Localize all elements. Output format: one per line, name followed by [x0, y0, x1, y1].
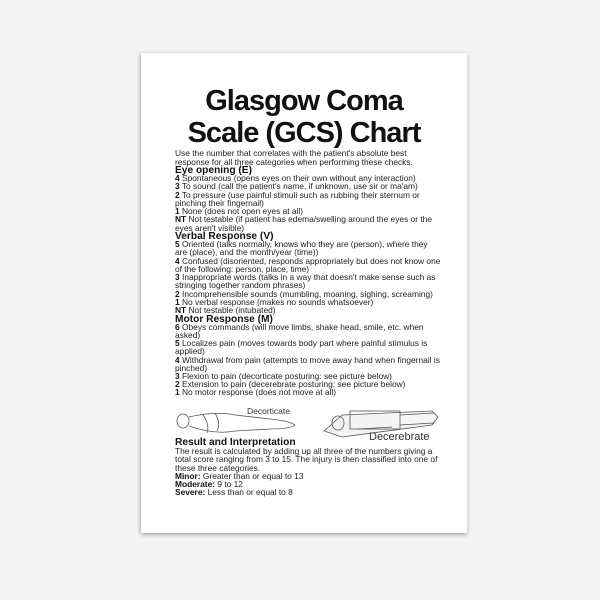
illustration: decerebrate: Decerebrate: [369, 431, 430, 443]
verbal list: 1 No verbal response (makes no sounds whatsoever): [175, 297, 373, 307]
title: Glasgow Coma: [205, 85, 403, 117]
heading: verbal response: Verbal Response (V): [175, 231, 274, 242]
verbal list: 5 Oriented (talks normally, knows who they are (person), where they: [175, 239, 428, 249]
result text: Moderate: 9 to 12: [175, 479, 243, 489]
intro text: [175, 148, 413, 167]
motor list: [175, 322, 440, 397]
intro text: response for all three categories when performing these checks.: [175, 157, 413, 167]
illustration: decorticate: Decorticate: [247, 406, 290, 416]
motor list: 1 No motor response (does not move at all): [175, 387, 336, 397]
verbal list: [175, 239, 440, 315]
motor list: 6 Obeys commands (will move limbs, shake head, smile, etc. when: [175, 322, 424, 332]
illustration: decerebrate: [323, 410, 438, 443]
title: [188, 85, 422, 149]
eye opening list: pinching their fingernail): [175, 198, 264, 208]
motor list: applied): [175, 346, 205, 356]
motor list: pinched): [175, 363, 207, 373]
motor list: 2 Extension to pain (decerebrate posturing: see picture below): [175, 379, 405, 389]
verbal list: 3 Inappropriate words (talks in a way that doesn't make sense such as: [175, 272, 435, 282]
eye opening list: 3 To sound (call the patient's name, if unknown, use sir or ma'am): [175, 181, 418, 191]
verbal list: of the following: person, place, time): [175, 264, 309, 274]
verbal list: are (place), and the month/year (time)): [175, 247, 318, 257]
motor list: 5 Localizes pain (moves towards body part where painful stimulus is: [175, 338, 427, 348]
eye opening list: 1 None (does not open eyes at all): [175, 206, 303, 216]
verbal list: 4 Confused (disoriented, responds appropriately but does not know one: [175, 256, 440, 266]
eye opening list: 4 Spontaneous (opens eyes on their own without any interaction): [175, 173, 416, 183]
heading: result and interpretation: Result and Interpretation: [175, 437, 296, 448]
eye opening list: eyes aren't visible): [175, 223, 244, 233]
heading: motor response: Motor Response (M): [175, 314, 273, 325]
result text: Minor: Greater than or equal to 13: [175, 471, 304, 481]
verbal list: stringing together random phrases): [175, 280, 305, 290]
intro text: Use the number that correlates with the patient's absolute best: [175, 148, 407, 158]
result text: these three categories.: [175, 463, 260, 473]
result text: total score ranging from 3 to 15. The injury is then classified into one of: [175, 454, 437, 464]
eye opening list: NT Not testable (if patient has edema/swelling around the eyes or the: [175, 214, 432, 224]
illustration: decorticate: [176, 406, 296, 434]
result text: [175, 446, 438, 497]
canvas print panel: [141, 53, 467, 533]
motor list: 4 Withdrawal from pain (attempts to move away hand when fingernail is: [175, 355, 440, 365]
eye opening list: 2 To pressure (use painful stimuli such as rubbing their sternum or: [175, 190, 420, 200]
motor list: 3 Flexion to pain (decorticate posturing: see picture below): [175, 371, 392, 381]
eye opening list: [175, 173, 432, 233]
result text: The result is calculated by adding up all three of the numbers giving a: [175, 446, 432, 456]
result text: Severe: Less than or equal to 8: [175, 487, 293, 497]
title: Scale (GCS) Chart: [188, 117, 420, 149]
verbal list: 2 Incomprehensible sounds (mumbling, moaning, sighing, screaming): [175, 289, 433, 299]
verbal list: NT Not testable (intubated): [175, 305, 276, 315]
heading: eye opening: Eye opening (E): [175, 165, 252, 176]
motor list: asked): [175, 330, 200, 340]
